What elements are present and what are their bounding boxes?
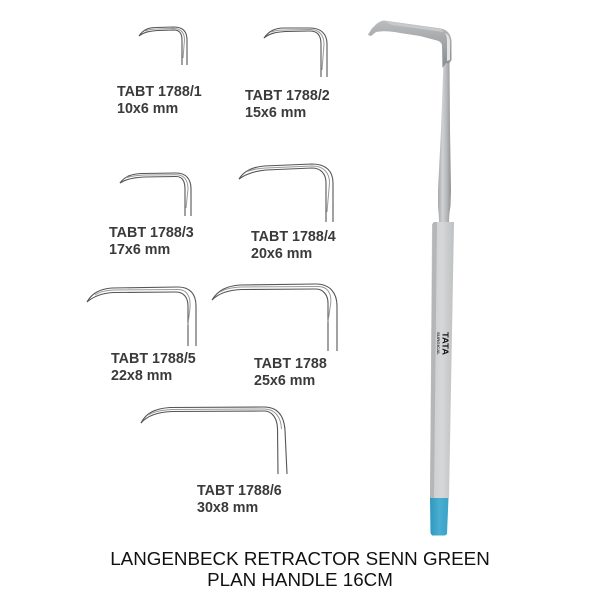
icon: hook TABT 1788/2: [264, 28, 327, 77]
label: TABT 1788/5: TABT 1788/5: [111, 351, 196, 367]
icon: hook TABT 1788/6: [141, 407, 287, 474]
title: PLAN HANDLE 16CM: [207, 569, 393, 590]
colour band: blue tip: [430, 498, 448, 536]
icon: hook TABT 1788: [212, 284, 337, 351]
icon: hook TABT 1788/1: [139, 27, 187, 65]
label: TABT 1788/5: 22x8 mm: [111, 368, 172, 384]
shaft: [438, 62, 451, 224]
icon: hook TABT 1788/3: [120, 173, 191, 216]
label: TABT 1788/1: TABT 1788/1: [117, 84, 202, 100]
label: TABT 1788: 25x6 mm: [254, 373, 315, 389]
icon: hook TABT 1788/4: [239, 164, 333, 222]
label: TABT 1788/4: TABT 1788/4: [251, 229, 336, 245]
blade: [368, 20, 452, 68]
handle logo: SURGICAL: [436, 332, 440, 356]
handle logo: TATA: [440, 332, 450, 355]
label: TABT 1788/2: 15x6 mm: [245, 105, 306, 121]
title: LANGENBECK RETRACTOR SENN GREEN: [110, 548, 490, 569]
retractor instrument: [368, 20, 454, 536]
handle logo: [436, 332, 450, 356]
label: TABT 1788/3: TABT 1788/3: [109, 225, 194, 241]
label: TABT 1788/2: TABT 1788/2: [245, 88, 330, 104]
label: TABT 1788/6: 30x8 mm: [197, 500, 258, 516]
label: TABT 1788/3: 17x6 mm: [109, 242, 170, 258]
label: TABT 1788/1: 10x6 mm: [117, 101, 178, 117]
label: TABT 1788/4: 20x6 mm: [251, 246, 312, 262]
handle: [430, 222, 454, 498]
label: TABT 1788: TABT 1788: [254, 356, 327, 372]
icon: hook TABT 1788/5: [87, 287, 196, 346]
label: TABT 1788/6: TABT 1788/6: [197, 483, 282, 499]
